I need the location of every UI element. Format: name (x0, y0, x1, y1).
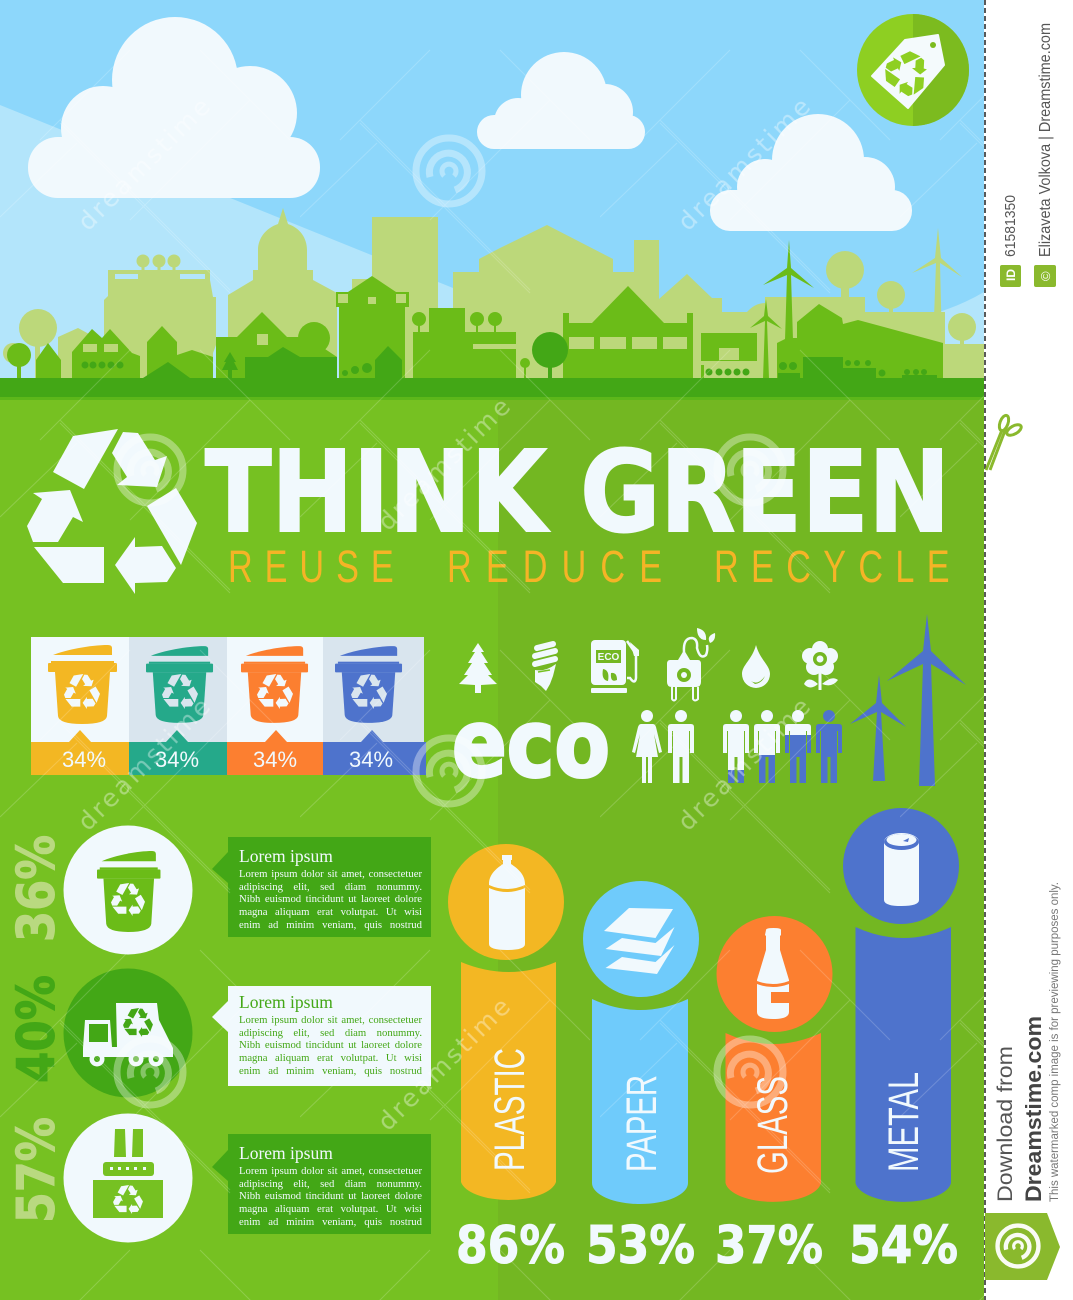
text box: Lorem ipsum (239, 992, 333, 1012)
icon: flower (802, 641, 838, 690)
icon: large wind turbine (887, 614, 966, 786)
person: woman (632, 710, 662, 783)
sidebar: image ID: 61581350 (1002, 195, 1019, 257)
person: white head and shoulders, blue body (785, 710, 811, 783)
sidebar: author credit: © (1038, 271, 1053, 281)
text box (212, 1134, 431, 1234)
text box: Nibh euismod tincidunt ut laoreet dolore (239, 893, 422, 905)
skyline: pale windows (83, 294, 757, 379)
watermark overlay: dreamstime (372, 992, 516, 1136)
sidebar: dreamstime logo tab (985, 1213, 1060, 1280)
bar: plastic 86%: PLASTIC (486, 1048, 534, 1171)
icon: water drop (742, 645, 770, 688)
sidebar: author credit: Elizaveta Volkova | Dreamstime.com (1037, 23, 1054, 257)
icon: pine tree (459, 643, 497, 693)
bin column: blue: 34% (349, 747, 393, 772)
person: all blue (816, 710, 842, 783)
people pictogram (632, 710, 842, 783)
skyline: dark foreground shapes and trees (0, 332, 984, 397)
text box: adipiscing elit, sed diam nonummy. (239, 1178, 422, 1190)
stat: 40% truck (7, 968, 431, 1098)
bar: glass 37% (715, 916, 832, 1276)
icon: recycle price tag badge (857, 14, 969, 126)
text box: Lorem ipsum dolor sit amet, consectetuer (239, 868, 422, 880)
bar: glass 37%: GLASS (749, 1076, 797, 1174)
bin column: orange: 34% (253, 747, 297, 772)
icon: bin circle (64, 826, 192, 954)
panel: four recycling bins (31, 637, 426, 775)
person: mostly white, blue feet (723, 710, 749, 783)
sidebar: download notice: Dreamstime.com (1021, 1016, 1046, 1202)
text box (212, 837, 431, 937)
bar: metal 54%: METAL (880, 1072, 928, 1172)
bar: paper 53%: PAPER (618, 1075, 666, 1172)
icon: eco fuel pump: ECO (598, 652, 620, 663)
sidebar: image ID (1000, 195, 1021, 287)
text box: magna aliquam erat volutpat. Ut wisi (239, 906, 422, 918)
text box: enim ad minim veniam, quis nostrud (239, 919, 422, 931)
bin column: blue (323, 637, 426, 775)
skyline: pale background buildings (3, 208, 984, 379)
icon: large recycle symbol (27, 429, 197, 594)
icon: eco fuel pump (591, 640, 639, 693)
title: THINK GREEN (205, 428, 950, 558)
bin column: teal: 34% (155, 747, 199, 772)
percentage label: 36% (7, 835, 67, 942)
text box: Lorem ipsum dolor sit amet, consectetuer (239, 1014, 422, 1026)
text box: Lorem ipsum (239, 846, 333, 866)
bar: plastic 86% (448, 844, 565, 1276)
icon: energy-saving bulb (535, 644, 556, 691)
icon: small wind turbine (850, 675, 906, 781)
bin column: orange (227, 637, 323, 775)
sky background (0, 0, 984, 400)
bin column: teal (129, 637, 227, 775)
text box: Lorem ipsum (239, 1143, 333, 1163)
bin column: yellow (31, 637, 129, 775)
text box: Nibh euismod tincidunt ut laoreet dolore (239, 1190, 422, 1202)
percentage label: 57% (7, 1117, 67, 1223)
watermark overlay: dreamstime (72, 692, 216, 836)
text box: adipiscing elit, sed diam nonummy. (239, 881, 422, 893)
percentage label: 40% (7, 975, 67, 1083)
bar chart: materials (448, 808, 959, 1276)
sidebar: download notice: This watermarked comp image is for previewing purposes only. (1049, 882, 1061, 1202)
icon: factory circle (64, 1114, 192, 1242)
cloud: right (710, 114, 912, 231)
icon: scissors (986, 414, 1023, 470)
sidebar: dashed cut line (984, 0, 986, 1300)
cloud: large left (28, 17, 320, 198)
eco word: eco (452, 690, 610, 799)
bar: paper 53%: 53% (586, 1216, 695, 1276)
sidebar: image ID: ID (1004, 269, 1018, 281)
person: white top, blue legs (754, 710, 780, 783)
text box: adipiscing elit, sed diam nonummy. (239, 1027, 422, 1039)
stat: 57% factory (7, 1114, 431, 1242)
bin column: yellow: 34% (62, 747, 106, 772)
text box: Lorem ipsum dolor sit amet, consectetuer (239, 1165, 422, 1177)
text box: Nibh euismod tincidunt ut laoreet dolore (239, 1039, 422, 1051)
subtitle: REDUCE (447, 543, 662, 592)
watermark overlay: dreamstime (672, 692, 816, 836)
sidebar: download notice (994, 882, 1061, 1202)
green ground background (0, 397, 984, 1300)
bar: metal 54%: 54% (849, 1216, 958, 1276)
bar: plastic 86%: 86% (456, 1216, 565, 1276)
bar: glass 37%: 37% (715, 1216, 823, 1276)
skyline: mid-green houses and factories (7, 240, 943, 379)
text box (212, 986, 431, 1086)
cloud: middle (477, 52, 645, 149)
icon: eco plug (667, 628, 715, 700)
watermark overlay: dreamstime (72, 92, 216, 236)
subtitle: RECYCLE (714, 543, 950, 592)
sidebar: download notice: Download from (994, 1046, 1017, 1202)
watermark overlay: dreamstime (372, 392, 516, 536)
city skyline (0, 208, 984, 397)
bar: paper 53% (583, 881, 699, 1276)
text box: magna aliquam erat volutpat. Ut wisi (239, 1203, 422, 1215)
subtitle (228, 543, 950, 592)
text box: enim ad minim veniam, quis nostrud (239, 1216, 422, 1228)
subtitle: REUSE (228, 543, 394, 592)
text box: enim ad minim veniam, quis nostrud (239, 1065, 422, 1077)
person: man (668, 710, 694, 783)
stat: 36% bin (7, 826, 431, 954)
watermark overlay: dreamstime (672, 92, 816, 236)
icon: truck circle (64, 968, 192, 1098)
sidebar: author credit (1034, 23, 1056, 287)
bar: metal 54% (843, 808, 959, 1276)
text box: magna aliquam erat volutpat. Ut wisi (239, 1052, 422, 1064)
